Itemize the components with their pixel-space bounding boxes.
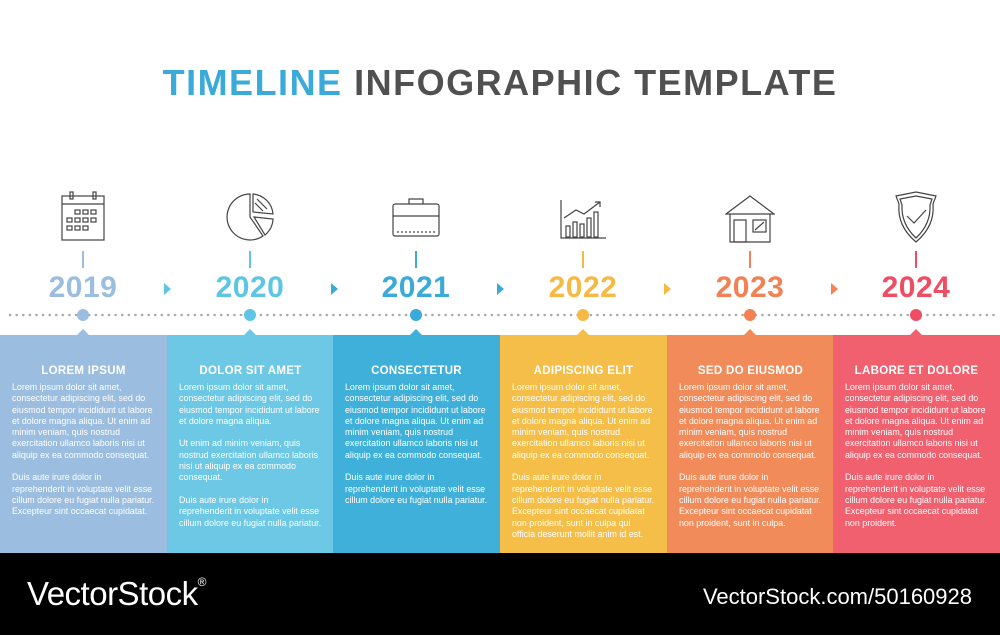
- panel: adipiscing elit: reprehenderit in voluptate velit esse: [512, 484, 652, 494]
- icon: pie chart: [226, 193, 274, 241]
- text: 2020: [216, 271, 284, 304]
- icon: house: [725, 195, 775, 243]
- panel: labore et dolore: aliquip ex ea commodo consequat.: [845, 450, 982, 460]
- panel: labore et dolore: minim veniam, quis nostrud: [845, 427, 953, 437]
- panel: lorem ipsum: et dolore magna aliqua. Ut enim ad: [12, 416, 150, 426]
- panel: consectetur: CONSECTETUR: [371, 365, 462, 377]
- icon: growth chart: [560, 200, 606, 239]
- panel: adipiscing elit: minim veniam, quis nostrud: [512, 427, 620, 437]
- panel: sed do eiusmod: [667, 335, 834, 553]
- panel: sed do eiusmod: Excepteur sint occaecat cupidatat: [679, 506, 812, 516]
- dotted timeline: [8, 314, 995, 316]
- panel: lorem ipsum: exercitation ullamco laboris nisi ut: [12, 438, 145, 448]
- panel: labore et dolore: eiusmod tempor incididunt ut labore: [845, 405, 986, 415]
- panel: dolor sit amet: consectetur adipiscing elit, sed do: [179, 393, 312, 403]
- panel: adipiscing elit: cillum dolore eu fugiat nulla pariatur.: [512, 495, 654, 505]
- text: 2023: [716, 271, 784, 304]
- panel: dolor sit amet: eiusmod tempor incididunt ut labore: [179, 405, 320, 415]
- footer url: VectorStock.com/50160928: [703, 584, 972, 609]
- panel: labore et dolore: Duis aute irure dolor in: [845, 472, 934, 482]
- panel: consectetur: et dolore magna aliqua. Ut enim ad: [345, 416, 483, 426]
- panel: lorem ipsum: [0, 335, 167, 553]
- text: 2021: [382, 271, 450, 304]
- panel: lorem ipsum: eiusmod tempor incididunt ut labore: [12, 405, 153, 415]
- panel: consectetur: reprehenderit in voluptate velit esse: [345, 484, 485, 494]
- panel: sed do eiusmod: exercitation ullamco laboris nisi ut: [679, 438, 812, 448]
- panel: labore et dolore: et dolore magna aliqua. Ut enim ad: [845, 416, 983, 426]
- panel: sed do eiusmod: cillum dolore eu fugiat nulla pariatur.: [679, 495, 821, 505]
- panel: dolor sit amet: Duis aute irure dolor in: [179, 495, 268, 505]
- panel: adipiscing elit: [500, 335, 667, 553]
- panel: sed do eiusmod: non proident, sunt in culpa.: [679, 518, 786, 528]
- panel: dolor sit amet: nostrud exercitation ullamco laboris: [179, 450, 318, 460]
- panel: labore et dolore: Excepteur sint occaecat cupidatat: [845, 506, 978, 516]
- panel: lorem ipsum: consectetur adipiscing elit, sed do: [12, 393, 145, 403]
- panel: labore et dolore: Lorem ipsum dolor sit amet,: [845, 382, 954, 392]
- icon: calendar: [61, 191, 105, 241]
- panel: labore et dolore: LABORE ET DOLORE: [855, 365, 978, 377]
- panel: sed do eiusmod: Lorem ipsum dolor sit amet,: [679, 382, 788, 392]
- arrows: [164, 283, 171, 295]
- panel: lorem ipsum: cillum dolore eu fugiat nulla pariatur.: [12, 495, 154, 505]
- panel: dolor sit amet: reprehenderit in voluptate velit esse: [179, 506, 319, 516]
- panel: consectetur: Lorem ipsum dolor sit amet,: [345, 382, 454, 392]
- icon: shield: [895, 191, 937, 243]
- panel: adipiscing elit: officia deserunt mollit anim id est.: [512, 529, 643, 539]
- icon: briefcase: [392, 198, 440, 237]
- panel: sed do eiusmod: SED DO EIUSMOD: [698, 365, 803, 377]
- panel: dolor sit amet: et dolore magna aliqua.: [179, 416, 272, 426]
- panel: labore et dolore: cillum dolore eu fugiat nulla pariatur.: [845, 495, 987, 505]
- panel: adipiscing elit: ADIPISCING ELIT: [534, 365, 633, 377]
- panel: sed do eiusmod: eiusmod tempor incididunt ut labore: [679, 405, 820, 415]
- panel: lorem ipsum: LOREM IPSUM: [41, 365, 126, 377]
- panel: lorem ipsum: aliquip ex ea commodo consequat.: [12, 450, 149, 460]
- panel: consectetur: exercitation ullamco laboris nisi ut: [345, 438, 478, 448]
- footer brand: VectorStock®: [27, 575, 206, 612]
- panel: adipiscing elit: eiusmod tempor incididunt ut labore: [512, 405, 653, 415]
- panel: labore et dolore: non proident.: [845, 518, 897, 528]
- panel: dolor sit amet: [167, 335, 334, 553]
- text: 2024: [882, 271, 950, 304]
- panel: labore et dolore: consectetur adipiscing elit, sed do: [845, 393, 978, 403]
- panel: consectetur: cillum dolore eu fugiat nulla pariatur.: [345, 495, 487, 505]
- panel: consectetur: minim veniam, quis nostrud: [345, 427, 453, 437]
- panel: dolor sit amet: nisi ut aliquip ex ea commodo: [179, 461, 296, 471]
- panel: labore et dolore: reprehenderit in voluptate velit esse: [845, 484, 985, 494]
- panel: consectetur: consectetur adipiscing elit, sed do: [345, 393, 478, 403]
- panel: adipiscing elit: exercitation ullamco laboris nisi ut: [512, 438, 645, 448]
- panel: lorem ipsum: Lorem ipsum dolor sit amet,: [12, 382, 122, 392]
- panel: sed do eiusmod: Duis aute irure dolor in: [679, 472, 768, 482]
- timeline markers: [82, 251, 917, 268]
- panel: lorem ipsum: minim veniam, quis nostrud: [12, 427, 120, 437]
- panel: sed do eiusmod: consectetur adipiscing elit, sed do: [679, 393, 812, 403]
- panel: adipiscing elit: Excepteur sint occaecat cupidatat: [512, 506, 645, 516]
- panel: dolor sit amet: consequat.: [179, 472, 222, 482]
- dots: [77, 309, 89, 321]
- panel: sed do eiusmod: reprehenderit in voluptate velit esse: [679, 484, 819, 494]
- panel: consectetur: aliquip ex ea commodo consequat.: [345, 450, 482, 460]
- panel: dolor sit amet: DOLOR SIT AMET: [199, 365, 302, 377]
- panel: sed do eiusmod: aliquip ex ea commodo consequat.: [679, 450, 816, 460]
- panel: adipiscing elit: aliquip ex ea commodo consequat.: [512, 450, 649, 460]
- panel: adipiscing elit: non proident, sunt in culpa qui: [512, 518, 630, 528]
- panel: consectetur: Duis aute irure dolor in: [345, 472, 434, 482]
- text: 2022: [549, 271, 617, 304]
- panel: dolor sit amet: Ut enim ad minim veniam, quis: [179, 438, 300, 448]
- panel: sed do eiusmod: minim veniam, quis nostrud: [679, 427, 787, 437]
- panel: consectetur: eiusmod tempor incididunt ut labore: [345, 405, 486, 415]
- footer bar: [0, 553, 1000, 635]
- panel: adipiscing elit: Lorem ipsum dolor sit amet,: [512, 382, 622, 392]
- panel: lorem ipsum: Excepteur sint occaecat cupidatat.: [12, 506, 147, 516]
- panel: adipiscing elit: consectetur adipiscing elit, sed do: [512, 393, 645, 403]
- panel: consectetur: [333, 335, 500, 553]
- panel: adipiscing elit: Duis aute irure dolor in: [512, 472, 601, 482]
- years: 2019: [49, 271, 117, 304]
- panel: adipiscing elit: et dolore magna aliqua. Ut enim ad: [512, 416, 650, 426]
- title: TIMELINE INFOGRAPHIC TEMPLATE: [163, 62, 837, 103]
- panel: dolor sit amet: Lorem ipsum dolor sit amet,: [179, 382, 288, 392]
- panel: lorem ipsum: reprehenderit in voluptate velit esse: [12, 484, 152, 494]
- panel: dolor sit amet: cillum dolore eu fugiat nulla pariatur.: [179, 518, 321, 528]
- panel: labore et dolore: [833, 335, 1000, 553]
- panel: lorem ipsum: Duis aute irure dolor in: [12, 472, 101, 482]
- panel: labore et dolore: exercitation ullamco laboris nisi ut: [845, 438, 978, 448]
- panel: sed do eiusmod: et dolore magna aliqua. Ut enim ad: [679, 416, 817, 426]
